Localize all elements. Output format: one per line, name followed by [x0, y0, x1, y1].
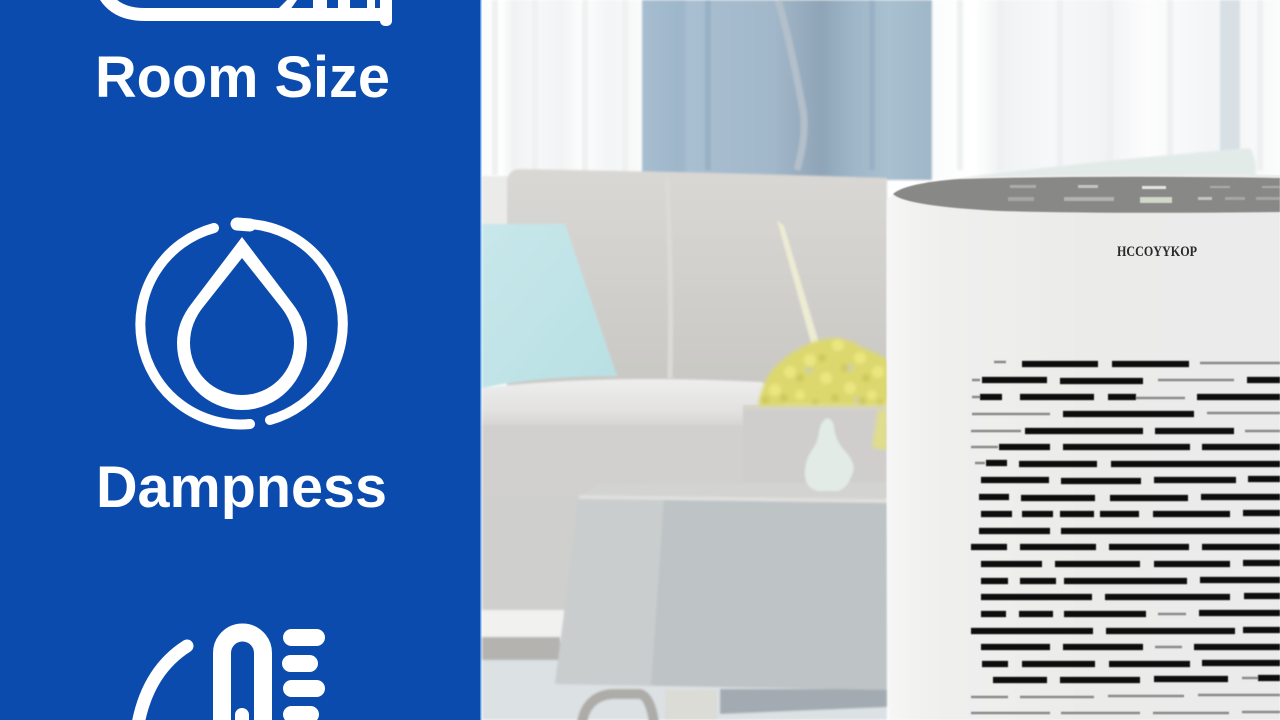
icon: temperature — [137, 629, 325, 720]
air purifier — [887, 174, 1280, 720]
cushion behind purifier — [960, 148, 1256, 178]
control panel — [893, 177, 1280, 213]
brand label: HCCOYYKOP — [1117, 244, 1197, 260]
yellow flower — [758, 338, 888, 450]
photo: living room background — [482, 0, 1280, 720]
purifier body — [887, 174, 1280, 720]
table top — [579, 482, 887, 500]
blue curtain — [642, 0, 932, 180]
tray — [743, 405, 887, 486]
table left face — [555, 497, 664, 686]
table front — [555, 497, 887, 690]
sofa seat front — [482, 415, 887, 495]
heading: Dampness: Dampness — [96, 455, 387, 520]
sofa back — [507, 169, 887, 400]
table leg — [582, 690, 717, 720]
heading: Room Size: Room Size — [95, 45, 390, 110]
icon: dampness droplet — [140, 224, 343, 424]
table edge — [579, 497, 887, 501]
display readouts — [1008, 185, 1280, 203]
white curtain right — [932, 0, 1280, 180]
sofa base — [482, 490, 887, 615]
white curtain left — [482, 0, 642, 180]
sofa seat cushion — [482, 379, 790, 425]
icon: room size — [104, 0, 392, 26]
sofa arm — [482, 176, 512, 236]
flower stem — [777, 220, 820, 346]
sofa fold — [667, 178, 671, 378]
white pear vase — [805, 418, 854, 491]
floor step — [482, 610, 887, 720]
air vent slats — [971, 362, 1280, 713]
pillow — [482, 224, 617, 388]
panel: blue sidebar — [0, 0, 482, 720]
